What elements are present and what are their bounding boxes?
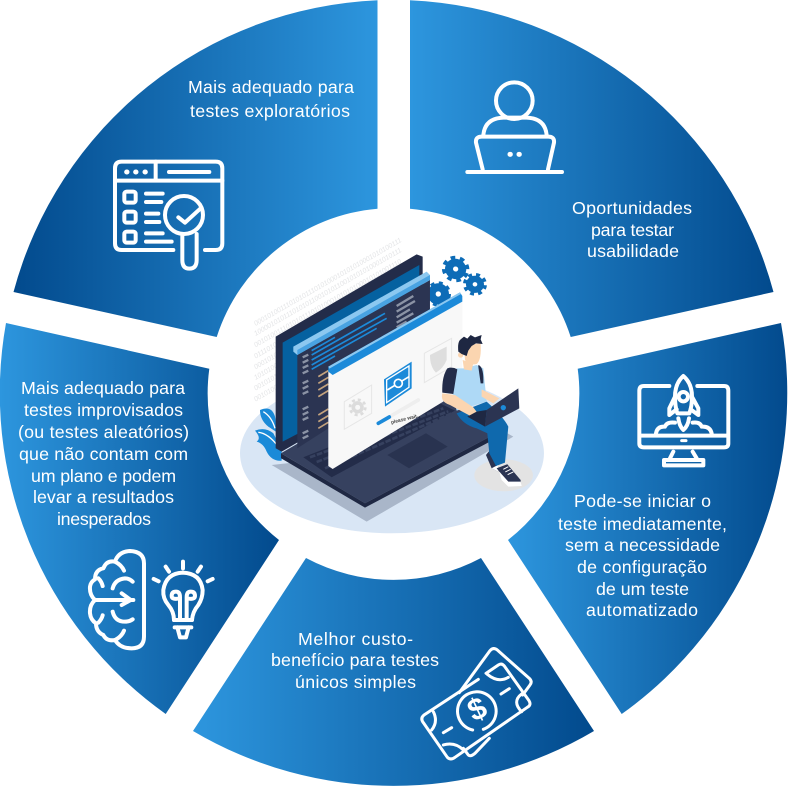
text: ad hoc tests: [18, 378, 189, 529]
text: ad hoc tests: (ou testes aleatórios): [18, 422, 189, 442]
panel: bottom segment: [193, 558, 594, 786]
icon: browser with magnifier: [115, 162, 222, 269]
binary code background: [253, 237, 403, 403]
text: cost benefit: Melhor custo-: [298, 629, 413, 649]
trackpad: [387, 433, 448, 468]
front shoe: [497, 464, 522, 487]
icon: banknotes: [422, 648, 531, 759]
binary code background: 0010101110101011001010110010101010001010111000: [253, 302, 403, 392]
text: usability: para testar: [591, 220, 674, 240]
text: cost benefit: únicos simples: [295, 672, 416, 692]
binary code background: 0001010011101010111010100010101010001010100111: [253, 237, 403, 328]
front white window: [328, 297, 462, 469]
torso: [453, 365, 487, 411]
text: exploratory tests: testes exploratórios: [190, 101, 350, 121]
gears: [426, 254, 486, 307]
central blue icon: [384, 362, 412, 407]
text: ad hoc tests: testes improvisados: [24, 400, 183, 420]
icon: banknotes: $: [462, 690, 492, 728]
progress bar: [378, 400, 418, 423]
text: ad hoc tests: levar a resultados: [33, 487, 174, 507]
illustration: developer on giant laptop: [240, 237, 544, 533]
laptop base: [281, 380, 490, 503]
text: usability: [572, 198, 692, 261]
text: usability: usabilidade: [587, 241, 679, 261]
binary code background: 0010100111010101110101000101010100010101001110: [253, 313, 403, 403]
text: exploratory tests: [188, 77, 354, 121]
illustration: developer on giant laptop: please wait...: [390, 413, 422, 426]
laptop shadow: [272, 423, 513, 522]
neck and face: [463, 360, 473, 371]
arm front: [442, 393, 478, 417]
text: start immediately: teste imediatamente,: [558, 514, 727, 534]
icon: person at laptop: [467, 82, 562, 172]
icon: brain: [90, 551, 144, 648]
shield tile: [424, 338, 452, 383]
text: exploratory tests: Mais adequado para: [188, 77, 354, 97]
laptop screen: [276, 254, 423, 452]
code window: [297, 280, 430, 448]
panel: top-right segment: [410, 0, 774, 337]
text: start immediately: de configuração: [577, 557, 707, 577]
icon: rocket on monitor: [639, 376, 728, 465]
text: ad hoc tests: Mais adequado para: [21, 378, 185, 398]
panel: left segment: [0, 323, 279, 714]
binary code background: 0111010011101010111010100010101010001010100111: [253, 270, 403, 360]
keyboard: [303, 403, 455, 477]
small laptop: [467, 410, 487, 427]
text: ad hoc tests: um plano e podem: [31, 466, 176, 486]
hair: [458, 335, 483, 356]
binary code background: 1000010101110101011001010110010101010001010111: [253, 247, 403, 338]
binary code background: 1010100111010101110101000101010100010101001110: [253, 291, 403, 382]
shoes shadow: [474, 459, 533, 491]
text: start immediately: Pode-se iniciar o: [574, 491, 711, 511]
plant: [255, 408, 282, 461]
text: start immediately: [558, 491, 727, 620]
person: [442, 335, 533, 491]
arm back: [482, 389, 499, 403]
panel: right segment: [508, 323, 787, 714]
text: ad hoc tests: inesperados: [57, 509, 151, 529]
binary code background: 0001010011101010111010100010101010001010100111: [253, 280, 403, 371]
back shoe: [486, 450, 498, 472]
panel: top-left segment: [14, 0, 378, 337]
jeans: [457, 402, 508, 466]
text: cost benefit: [271, 629, 439, 692]
text: start immediately: sem a necessidade: [565, 535, 720, 555]
illustration base ellipse: [240, 373, 544, 533]
binary code background: 0010100111010101110101000101010100010101001110: [253, 258, 403, 349]
text: start immediately: automatizado: [586, 600, 698, 620]
text: start immediately: de um teste: [596, 579, 689, 599]
text: usability: Oportunidades: [572, 198, 692, 218]
icon: light bulb: [154, 562, 213, 637]
text: ad hoc tests: que não contam com: [19, 444, 188, 464]
gear tile: [344, 385, 372, 429]
text: cost benefit: benefício para testes: [271, 650, 439, 670]
